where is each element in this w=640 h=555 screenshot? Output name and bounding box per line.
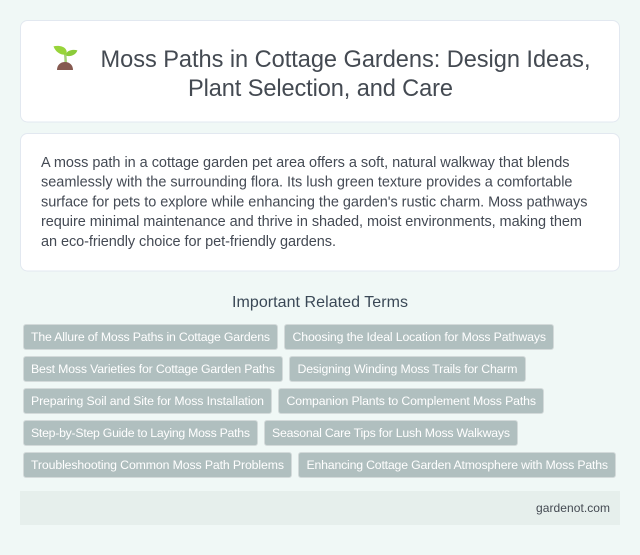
tag: Troubleshooting Common Moss Path Problems: [31, 458, 284, 472]
tag: [24, 356, 282, 382]
tag: [24, 324, 278, 350]
tag: [298, 452, 616, 478]
heading: related terms: Important Related Terms: [232, 294, 408, 311]
title: [100, 47, 590, 102]
panel: header: [20, 20, 620, 122]
tag: Enhancing Cottage Garden Atmosphere with Moss Paths: [306, 458, 608, 472]
tag: [278, 388, 544, 414]
text block: description: require minimal maintenance and thrive in shaded, moist environments, making them: [41, 214, 582, 230]
tag: The Allure of Moss Paths in Cottage Gardens: [31, 330, 270, 344]
text block: description: [41, 155, 588, 250]
tag: [24, 420, 258, 446]
text block: description: A moss path in a cottage garden pet area offers a soft, natural walkway that blends: [41, 155, 570, 171]
tag: Best Moss Varieties for Cottage Garden Paths: [31, 362, 275, 376]
tag: Preparing Soil and Site for Moss Installation: [31, 394, 264, 408]
tag: Choosing the Ideal Location for Moss Pathways: [292, 330, 546, 344]
tag: Seasonal Care Tips for Lush Moss Walkways: [272, 426, 510, 440]
panel: description: [20, 134, 620, 271]
tag: Companion Plants to Complement Moss Paths: [286, 394, 536, 408]
tag: [24, 452, 292, 478]
tag: Step-by-Step Guide to Laying Moss Paths: [31, 426, 250, 440]
tag: Designing Winding Moss Trails for Charm: [298, 362, 518, 376]
footer source text: gardenot.com: [536, 501, 610, 515]
text block: description: an eco-friendly choice for pet-friendly gardens.: [41, 234, 336, 250]
tag: [290, 356, 526, 382]
tag: [264, 420, 518, 446]
text block: description: seamlessly with the surrounding flora. Its lush green texture provides a comfortable: [41, 175, 572, 191]
footer: [20, 491, 620, 525]
icon: seedling: [54, 46, 77, 70]
tag: [284, 324, 554, 350]
title: Moss Paths in Cottage Gardens: Design Ideas,: [100, 47, 590, 73]
title: Plant Selection, and Care: [188, 76, 453, 102]
tag: [24, 388, 272, 414]
tag list: [24, 324, 616, 478]
text block: description: surface for pets to explore while enhancing the garden's rustic charm. Moss pathways: [41, 194, 588, 210]
